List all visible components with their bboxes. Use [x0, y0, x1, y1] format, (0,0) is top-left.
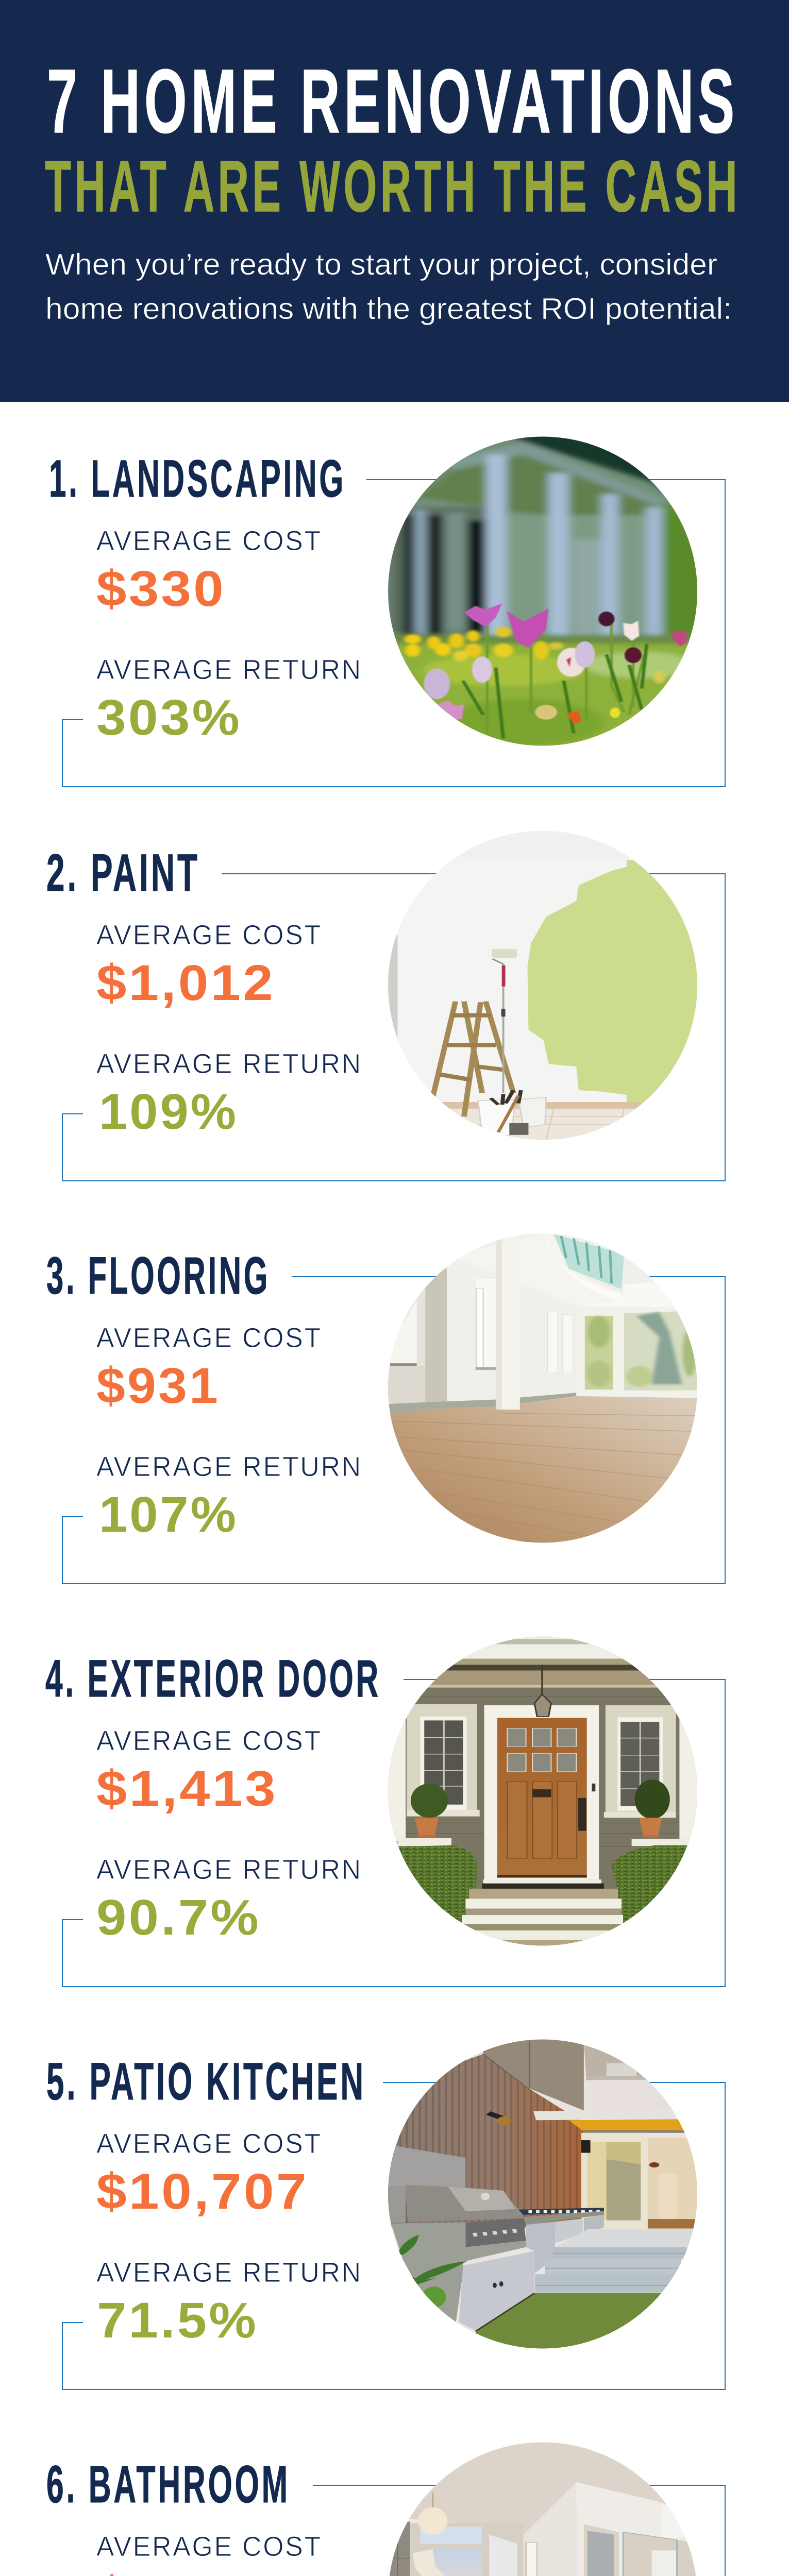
return value: 107%	[99, 1486, 238, 1543]
return label: AVERAGE RETURN	[96, 2257, 362, 2288]
hedges	[398, 1845, 477, 1922]
connector frame	[62, 874, 725, 1181]
return value: 71.5%	[97, 2292, 258, 2348]
photo: porch with tulips	[382, 434, 704, 749]
connector frame	[62, 480, 725, 787]
sculpture	[413, 2549, 444, 2576]
return value: 90.7%	[96, 1889, 261, 1945]
lantern	[534, 1665, 551, 1717]
pendant	[432, 2493, 433, 2508]
intro text line 2: home renovations with the greatest ROI potential:	[45, 292, 732, 326]
panel: 6 bathroom	[46, 2437, 725, 2576]
cost label: AVERAGE COST	[96, 920, 322, 951]
cost label: AVERAGE COST	[96, 1323, 322, 1353]
connector frame	[62, 2082, 725, 2389]
photo: front door and porch	[382, 1634, 704, 1949]
panel: 3 flooring	[46, 1232, 725, 1584]
cost value: $10,707	[96, 2163, 309, 2219]
heading: 2. PAINT	[46, 843, 200, 902]
cost label: AVERAGE COST	[96, 526, 322, 556]
heading: 1. LANDSCAPING	[49, 449, 346, 508]
return value: 303%	[96, 689, 242, 745]
return label: AVERAGE RETURN	[96, 1048, 362, 1079]
cost value: $1,012	[96, 955, 275, 1011]
photo: painted wall with ladder	[382, 827, 704, 1143]
panel: header	[0, 0, 789, 402]
cost value: $1,413	[96, 1760, 278, 1817]
connector frame	[62, 2485, 725, 2576]
cost label: AVERAGE COST	[96, 1725, 322, 1756]
photo: empty room with wood floor	[382, 1232, 704, 1547]
panel: 5 patio kitchen	[46, 2036, 725, 2389]
photo: bathroom with view	[382, 2437, 704, 2576]
intro text: When you’re ready to start your project, consider	[45, 248, 717, 281]
door	[484, 1705, 599, 1884]
cost value: $931	[96, 1358, 220, 1414]
return label: AVERAGE RETURN	[96, 654, 362, 685]
heading: 3. FLOORING	[46, 1246, 270, 1305]
roller	[502, 964, 505, 1093]
connector frame	[62, 1277, 725, 1584]
panel: 2 paint	[46, 827, 725, 1181]
panel: 1 landscaping	[49, 434, 725, 787]
photo: outdoor patio kitchen	[382, 2036, 704, 2351]
heading: 5. PATIO KITCHEN	[46, 2052, 366, 2111]
connector frame	[62, 1680, 725, 1987]
cost value: $330	[96, 561, 226, 617]
heading: 6. BATHROOM	[46, 2455, 290, 2514]
heading: 4. EXTERIOR DOOR	[45, 1649, 381, 1708]
planters	[411, 1784, 448, 1818]
steps	[469, 1889, 618, 1899]
right window	[606, 1705, 676, 1813]
return label: AVERAGE RETURN	[96, 1854, 362, 1885]
cost label: AVERAGE COST	[96, 2531, 322, 2562]
cost label: AVERAGE COST	[96, 2128, 322, 2159]
buckets	[518, 1097, 546, 1128]
left window	[407, 1704, 477, 1812]
doorway	[584, 2524, 619, 2576]
return value: 109%	[99, 1083, 238, 1140]
panel: 4 exterior door	[45, 1634, 725, 1987]
shower	[623, 2532, 697, 2576]
return label: AVERAGE RETURN	[96, 1451, 362, 1482]
ladder	[433, 1002, 513, 1116]
